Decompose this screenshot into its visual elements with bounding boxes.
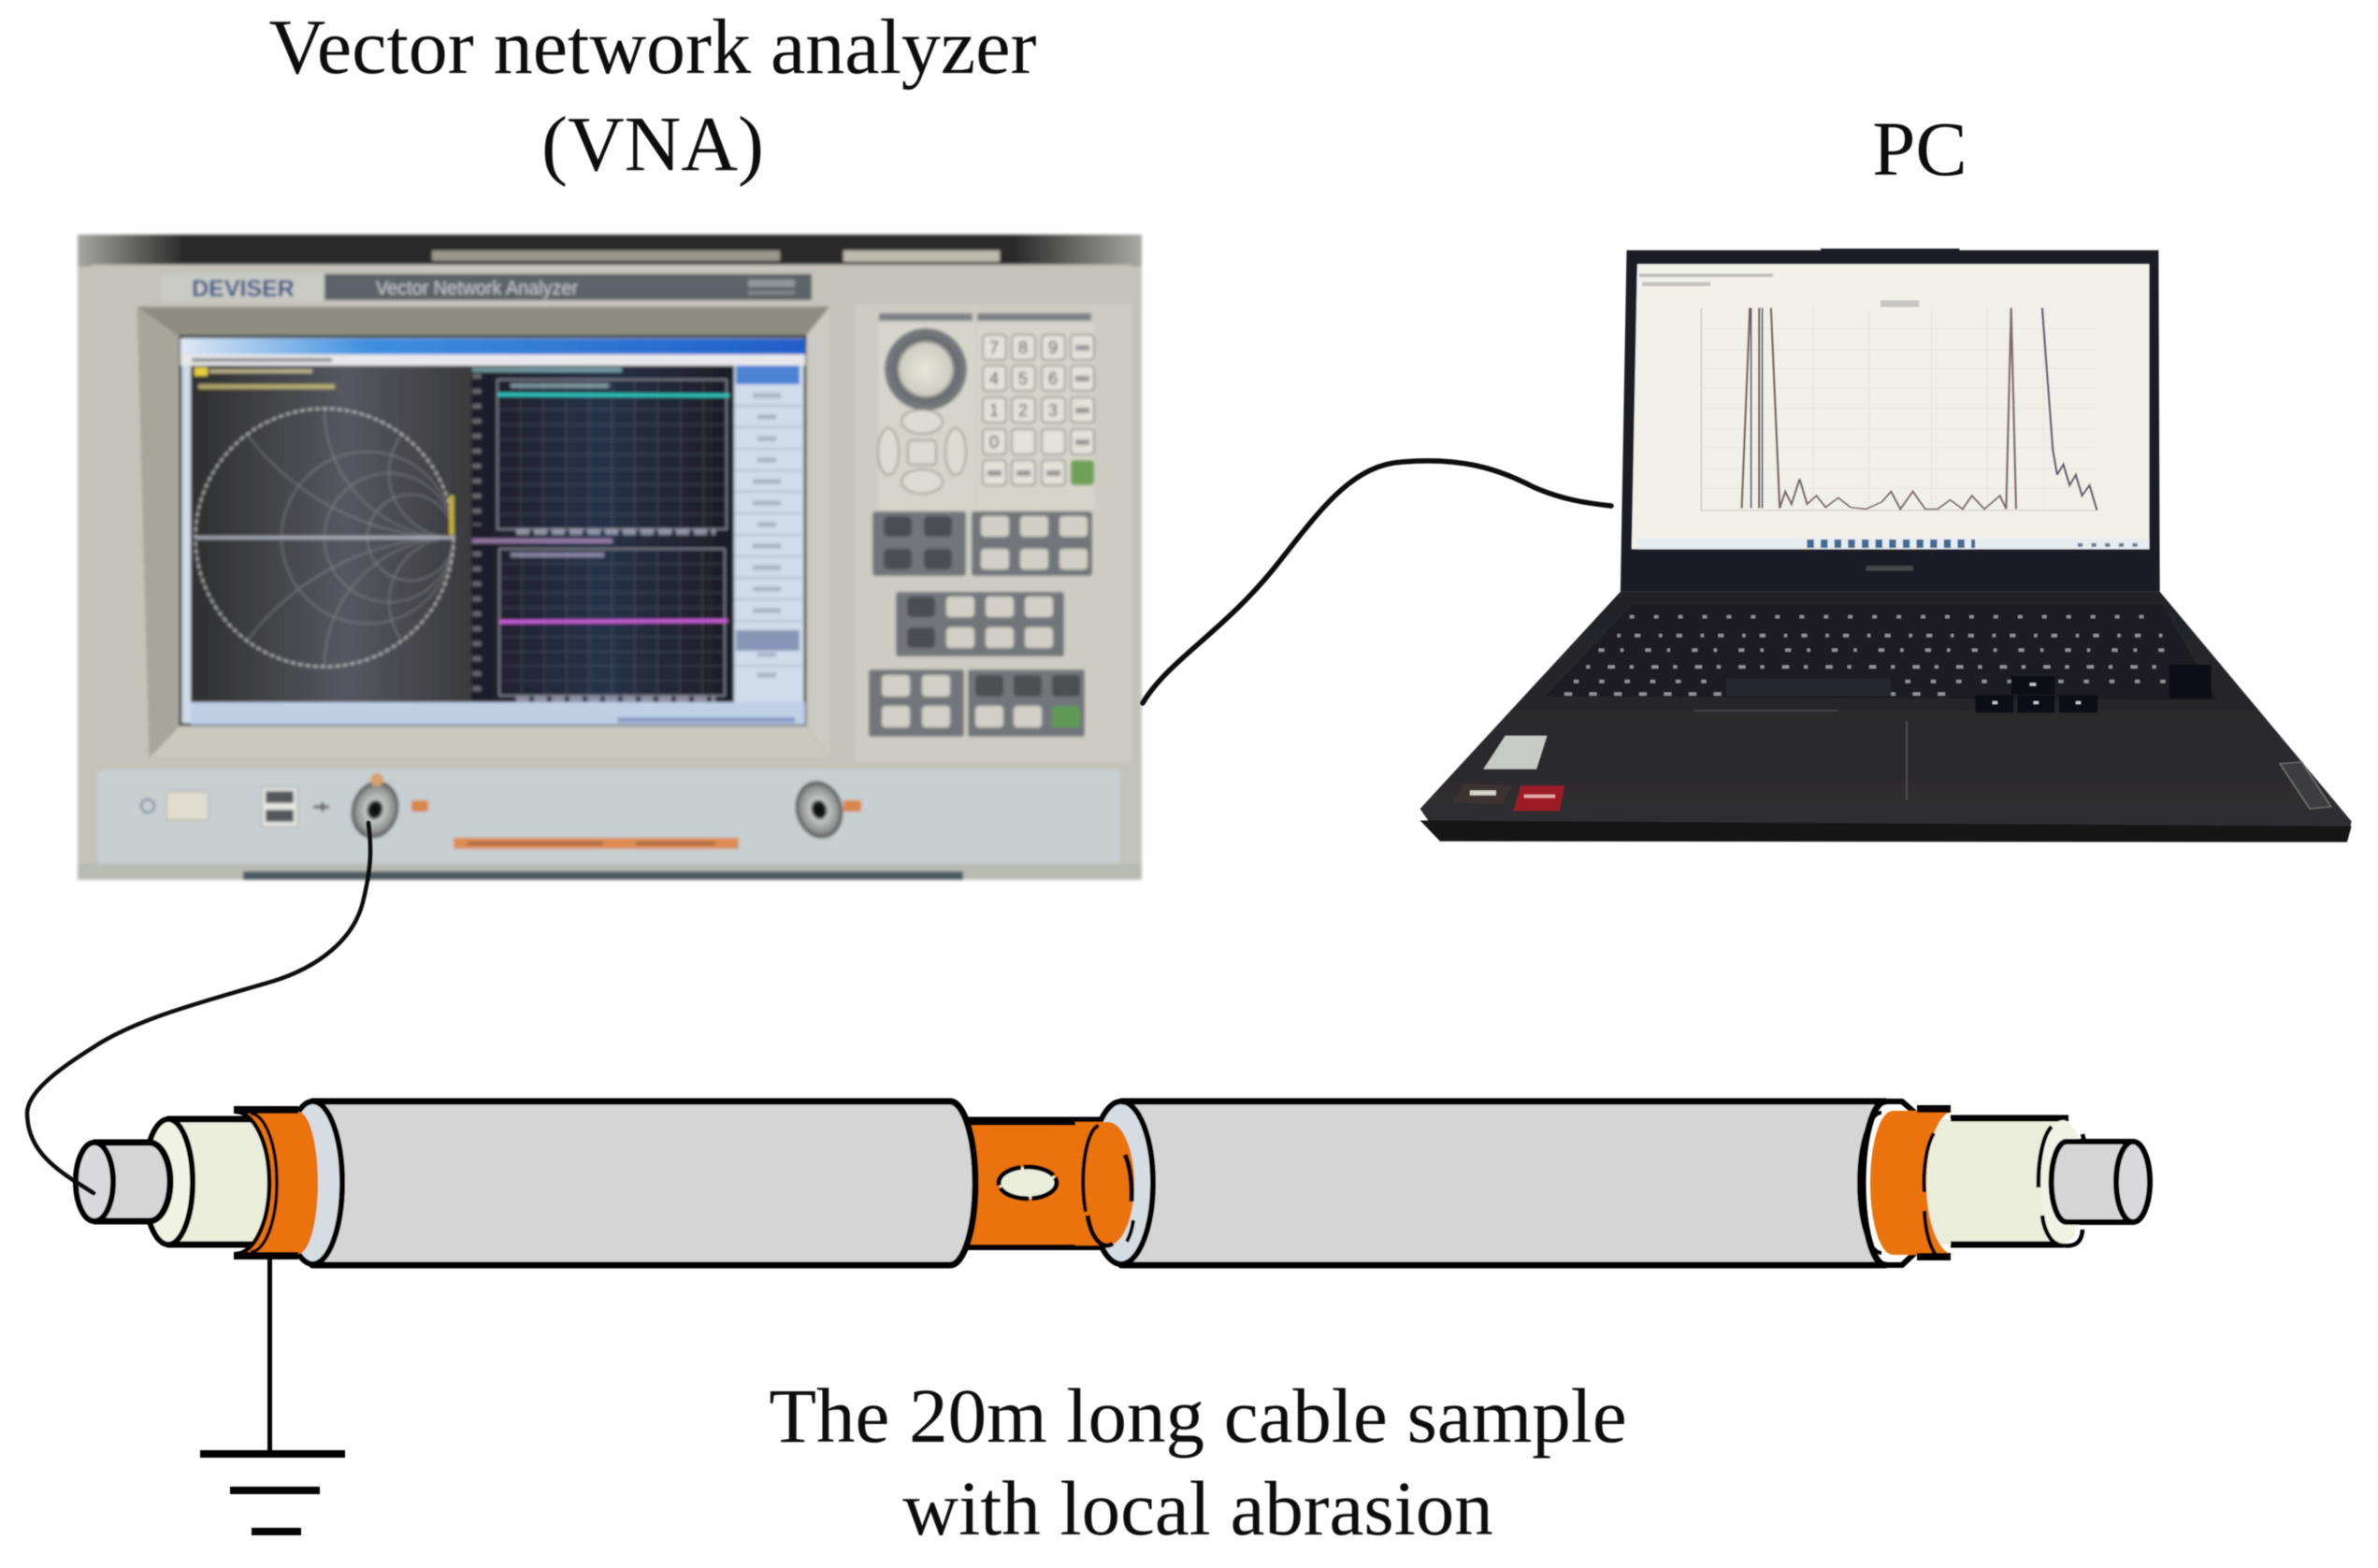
- front control panel: [856, 304, 1131, 762]
- numeric keypad: 5: [1018, 369, 1028, 388]
- title: PC: PC: [1872, 106, 1967, 192]
- numeric keypad: 3: [1048, 401, 1058, 420]
- model strip: Vector Network Analyzer: [324, 274, 812, 300]
- numeric keypad: 8: [1018, 338, 1028, 357]
- cable: VNA port to sample core: [27, 823, 370, 1193]
- left conductor core: [76, 1143, 170, 1221]
- port 1 connector: [345, 773, 428, 843]
- display screen: [178, 333, 808, 727]
- photo: laptop PC: [1420, 249, 2352, 842]
- numeric keypad: 2: [1018, 401, 1028, 420]
- left jacket: [283, 1101, 975, 1265]
- navigation keys: [878, 410, 966, 494]
- Lenovo bezel mark: [1866, 566, 1913, 571]
- Legion label: [2280, 762, 2331, 809]
- title: Vector network analyzer (VNA): [269, 4, 1036, 188]
- laptop lid: [1621, 249, 2160, 592]
- right copper shield: [1859, 1109, 1954, 1257]
- left insulation: [144, 1119, 281, 1244]
- title: Vector network analyzer (VNA): Vector network analyzer: [269, 4, 1036, 91]
- inner shield inside right jacket end: [1075, 1122, 1134, 1245]
- caption: cable sample: with local abrasion: [902, 1465, 1493, 1551]
- sticker: white: [1483, 736, 1547, 770]
- port 2 connector: [789, 776, 861, 843]
- caption: cable sample: [769, 1373, 1627, 1551]
- power button: [141, 792, 209, 820]
- arrow keys: [1975, 676, 2097, 712]
- softkey column: [734, 366, 801, 702]
- lower port strip: [78, 770, 1142, 880]
- numeric keypad: 6: [1048, 369, 1058, 388]
- sticker: AMD: [1452, 784, 1511, 804]
- numeric keypad: 7: [989, 338, 999, 357]
- right jacket: [1089, 1101, 1917, 1265]
- display bezel: [137, 307, 829, 757]
- numeric keypad: 4: [989, 369, 999, 388]
- numeric keypad: [983, 335, 1094, 485]
- middle exposed shield with abrasion: [954, 1121, 1131, 1247]
- photo: vector network analyzer: [76, 232, 1144, 883]
- right insulation: [1908, 1118, 2085, 1245]
- logo strip: DEVISER: DEVISER: [192, 276, 295, 302]
- warning label: [454, 838, 739, 849]
- laptop base: [1420, 592, 2352, 842]
- right conductor core: [2052, 1142, 2150, 1222]
- sticker: red: [1513, 785, 1564, 811]
- abrasion hole: [999, 1167, 1057, 1199]
- numeric keypad: 1: [989, 401, 999, 420]
- trackpad: [1693, 711, 1907, 800]
- numeric keypad: 9: [1048, 338, 1058, 357]
- frequency response plot: [1701, 308, 2097, 511]
- ground symbol: [200, 1253, 345, 1532]
- keyboard: [1546, 604, 2218, 700]
- lower trace plot: [472, 539, 728, 699]
- model strip: Vector Network Analyzer: Vector Network Analyzer: [376, 278, 578, 299]
- caption: cable sample: The 20m long cable sample: [769, 1373, 1627, 1459]
- USB ports: [262, 787, 329, 827]
- title: Vector network analyzer (VNA): (VNA): [541, 101, 764, 188]
- laptop screen: [1632, 264, 2149, 549]
- left copper shield: [234, 1110, 318, 1256]
- key group panels: [869, 511, 1092, 737]
- smith chart: [193, 406, 457, 669]
- rotary knob: [885, 328, 967, 410]
- upper trace plot: [472, 367, 729, 532]
- cable: VNA to PC: [1143, 461, 1611, 703]
- numeric keypad: 0: [989, 433, 999, 452]
- cable sample illustration: [76, 1101, 2150, 1265]
- logo strip: DEVISER: [161, 274, 324, 302]
